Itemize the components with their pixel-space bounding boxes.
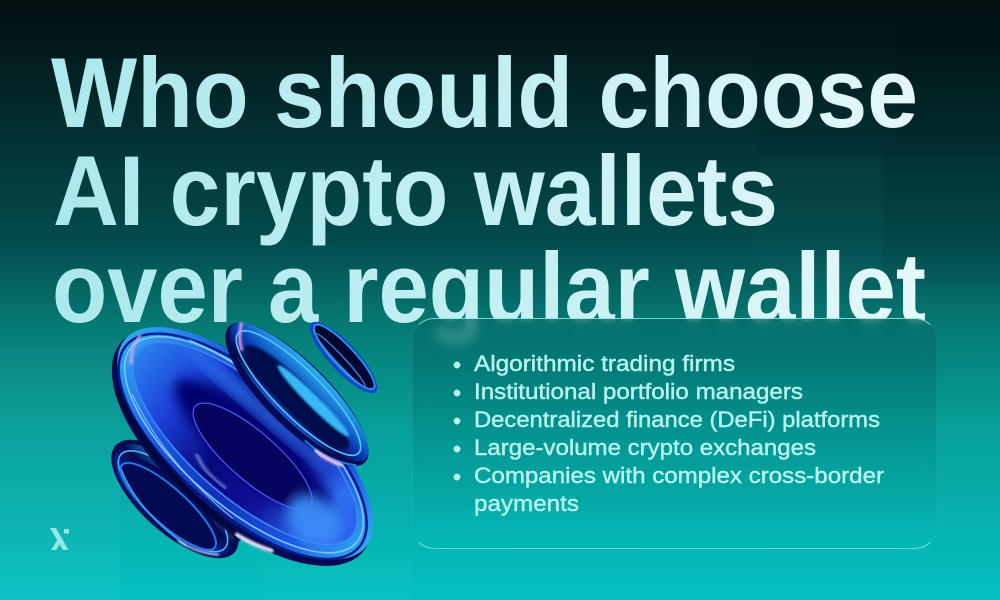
- bullet list: Decentralized finance (DeFi) platforms: [474, 407, 880, 432]
- bullet list: payments: [474, 491, 579, 516]
- panel: audience list: [412, 318, 937, 549]
- bullet list: Institutional portfolio managers: [474, 379, 803, 404]
- icon: logo: [50, 528, 69, 550]
- title: over a regular wallet: [52, 232, 926, 343]
- lens: lower left disc: [93, 420, 257, 578]
- lens: small disc: [301, 314, 386, 401]
- bullet list: Algorithmic trading firms: [474, 351, 735, 376]
- bullet list: Companies with complex cross-border: [474, 463, 884, 488]
- lens: main disc: [73, 286, 411, 600]
- title: AI crypto wallets: [53, 135, 778, 246]
- bullet list: Large-volume crypto exchanges: [474, 435, 816, 460]
- bullet list: [454, 351, 884, 516]
- lens: upper right disc: [206, 304, 388, 485]
- title: Who should choose: [51, 37, 918, 148]
